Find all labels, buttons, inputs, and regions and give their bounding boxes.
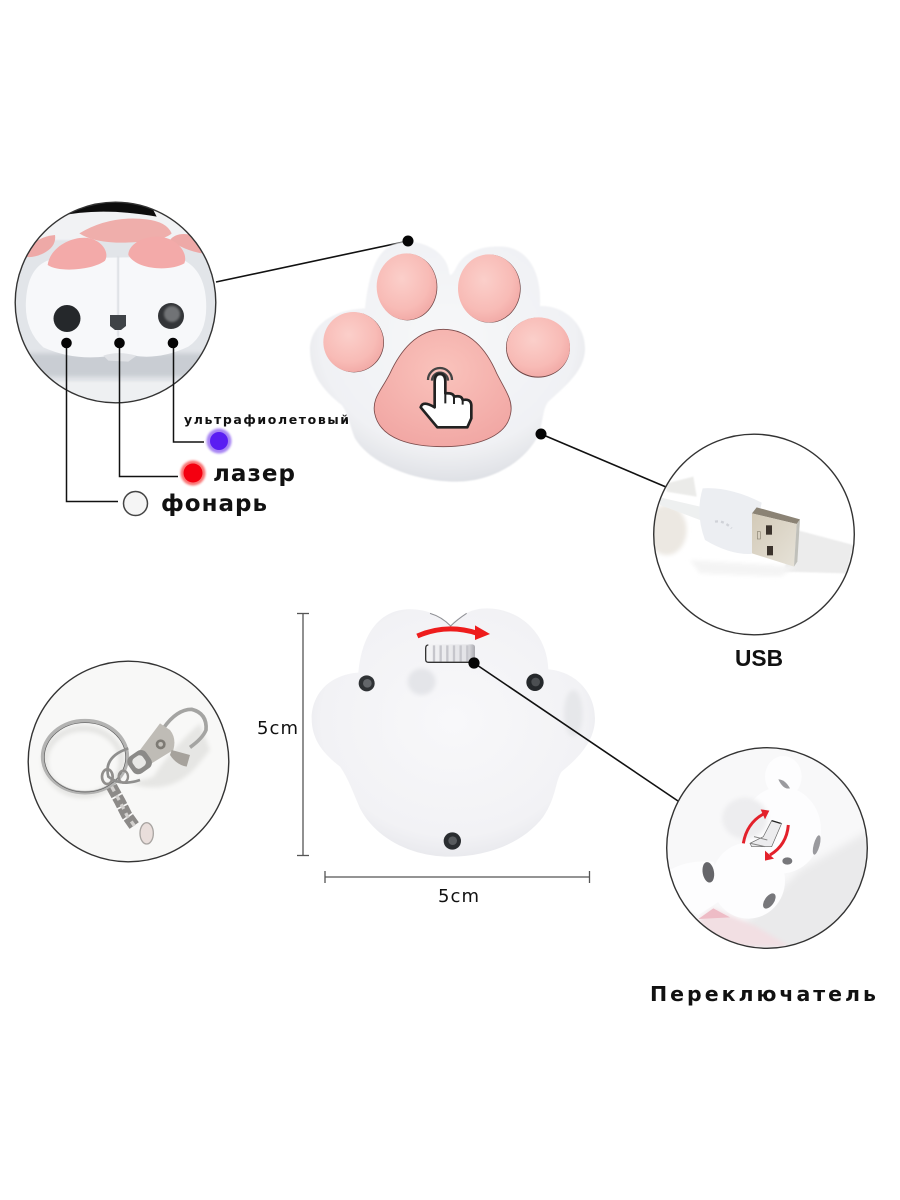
callout lines: lens to labels [66,343,204,502]
USB connector photo [654,477,853,575]
anchor dot: top of paw [402,236,414,246]
dimple shading near wheel [408,668,436,695]
icon: white light dot [124,492,148,516]
label: height 5cm: 5cm [257,718,298,739]
toe pad left [324,312,384,372]
connector line: front paw to lens close-up [216,241,408,282]
label: ultraviolet: ультрафиолетовый [184,412,349,427]
label: laser: лазер [213,461,295,487]
split ring [43,721,127,793]
red rotation arrow [417,625,490,640]
anchor dot: side of paw [536,428,546,440]
keychain photo [37,708,214,845]
front toe left [48,238,106,270]
callout anchor dots [61,338,178,348]
clasp hook [163,709,206,747]
laser lens [110,315,126,330]
anchor dot: wheel [468,657,480,669]
circle outline [654,434,854,635]
notch line [430,613,467,626]
clasp body [140,723,174,763]
paw body back [312,608,595,857]
panel: USB close-up circle [647,430,860,640]
circle outline [28,661,229,862]
label: switch: Переключатель [650,982,876,1006]
red arrows [743,814,788,855]
screw right [526,674,544,691]
back view of paw [312,608,595,857]
lens close-up photo [16,202,215,402]
chain [112,787,135,827]
connector line: front paw to USB close-up [541,434,666,487]
device lobes [730,864,806,918]
toe pad 2 [459,255,521,323]
switch photo [697,779,866,948]
label: width 5cm: 5cm [438,886,479,907]
front toe right [128,237,185,268]
toe pad 1 [377,254,437,320]
label: USB: USB [735,645,783,671]
screw left [359,675,375,691]
panel: lens close-up circle [14,202,216,404]
icon: purple light dot [206,428,232,454]
toe pad right [506,318,570,378]
soft side highlights [564,690,583,737]
main pad [374,329,511,447]
screw bottom [444,832,461,850]
dimension: height line [297,613,309,856]
small ring [107,748,140,783]
panel: switch close-up circle [663,747,870,953]
dimension: width line [325,871,590,883]
paw body [310,242,585,482]
icon: tapping hand [421,368,471,427]
front view of paw [310,242,585,482]
flashlight lens [54,305,80,332]
circle outline [15,202,216,403]
circle outline [667,748,867,948]
label: flashlight: фонарь [161,491,267,517]
connector line: back wheel to switch close-up [474,663,678,801]
UV lens [158,303,184,329]
icon: red light dot [180,460,206,486]
panel: keychain close-up circle [27,658,233,865]
thumb wheel [426,644,475,662]
switch slot [750,821,782,847]
